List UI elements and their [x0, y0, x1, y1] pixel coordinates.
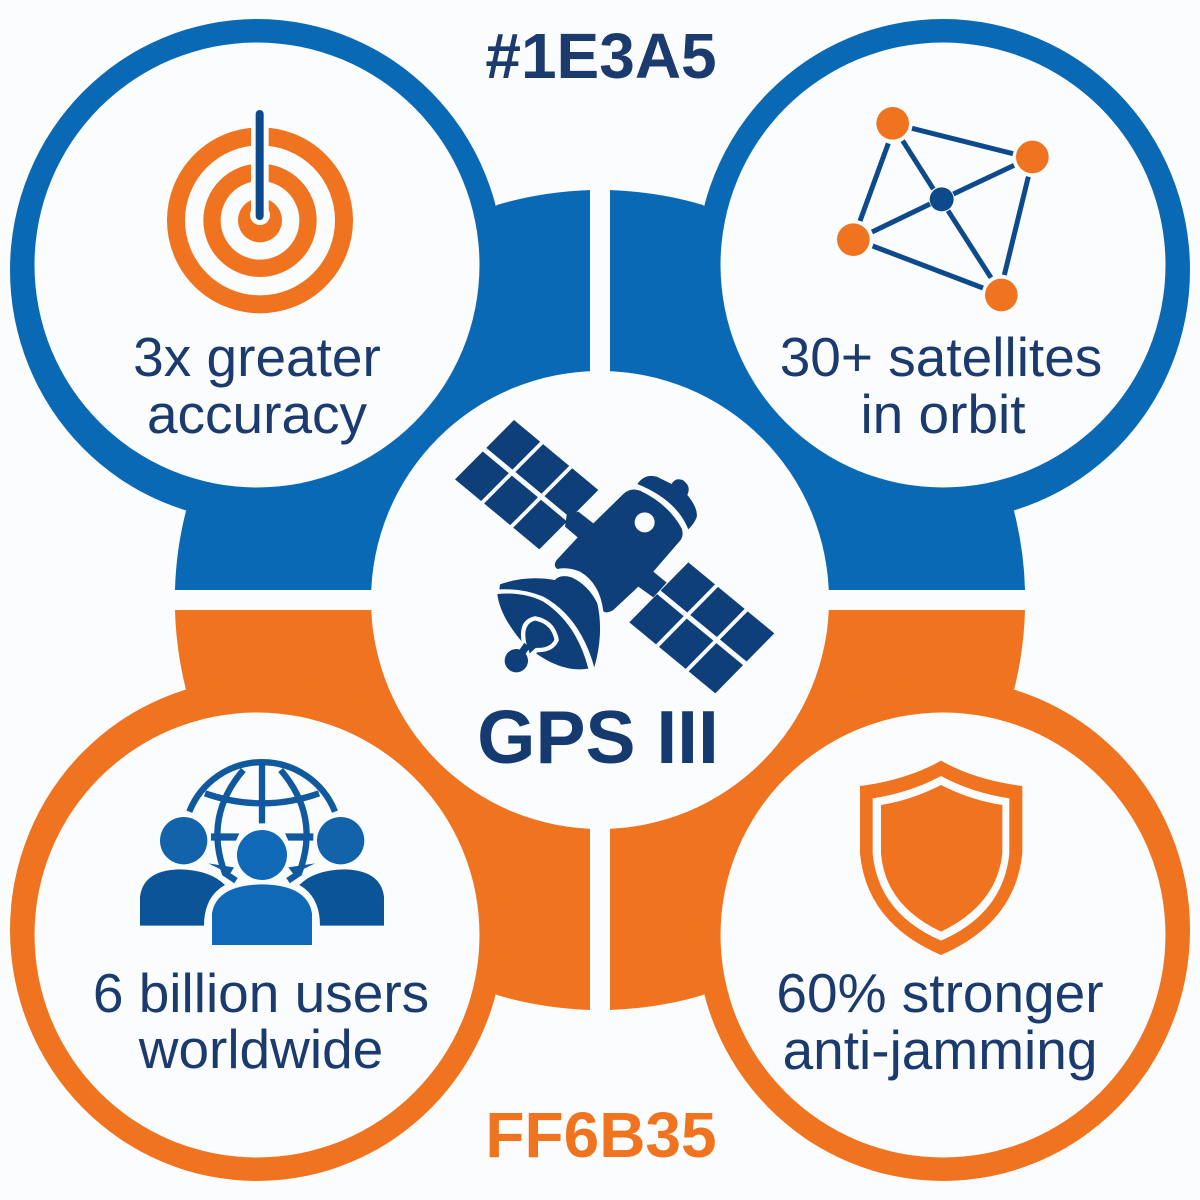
- text: users: 6 billion users: [93, 962, 429, 1024]
- connector: top left: [175, 190, 590, 590]
- panel: center circle: [371, 371, 829, 829]
- satellite cap: [637, 476, 697, 529]
- connector: bottom right: [610, 610, 1025, 1010]
- text: anti-jamming: 60% stronger: [776, 962, 1104, 1024]
- text: accuracy: accuracy: [147, 383, 368, 445]
- panel: anti-jamming circle: [696, 679, 1190, 1181]
- icon: satellite network: [837, 107, 1049, 311]
- lower solar panel: [629, 562, 774, 693]
- text: anti-jamming: [776, 962, 1104, 1081]
- icon: target: [176, 110, 344, 304]
- dish feed: [523, 618, 557, 657]
- panel: accuracy circle: [10, 19, 504, 521]
- heading: top label: #1E3A5: [485, 20, 717, 92]
- icon: satellite: [455, 420, 774, 693]
- heading: GPS III: GPS III: [477, 695, 719, 779]
- text: satellites: 30+ satellites: [780, 326, 1102, 388]
- dish upper crescent: [499, 576, 600, 667]
- dish lower: [497, 594, 588, 669]
- feed ball and neck: [516, 645, 527, 661]
- connector: bottom left: [175, 610, 590, 1010]
- icon: globe and people: [140, 762, 384, 945]
- panel: satellites circle: [696, 19, 1190, 521]
- text: users: [93, 962, 429, 1080]
- satellite body: [555, 490, 683, 612]
- text: users: worldwide: [138, 1018, 383, 1080]
- text: accuracy: 3x greater: [133, 326, 381, 388]
- icon: shield: [860, 761, 1022, 955]
- text: satellites: [780, 326, 1102, 445]
- text: accuracy: [133, 326, 381, 445]
- upper solar panel: [455, 420, 598, 549]
- text: anti-jamming: anti-jamming: [783, 1019, 1097, 1081]
- text: satellites: in orbit: [860, 383, 1026, 445]
- connector: top right: [610, 190, 1025, 590]
- window: [635, 512, 655, 532]
- panel: users circle: [10, 679, 504, 1181]
- heading: bottom label: FF6B35: [485, 1099, 717, 1171]
